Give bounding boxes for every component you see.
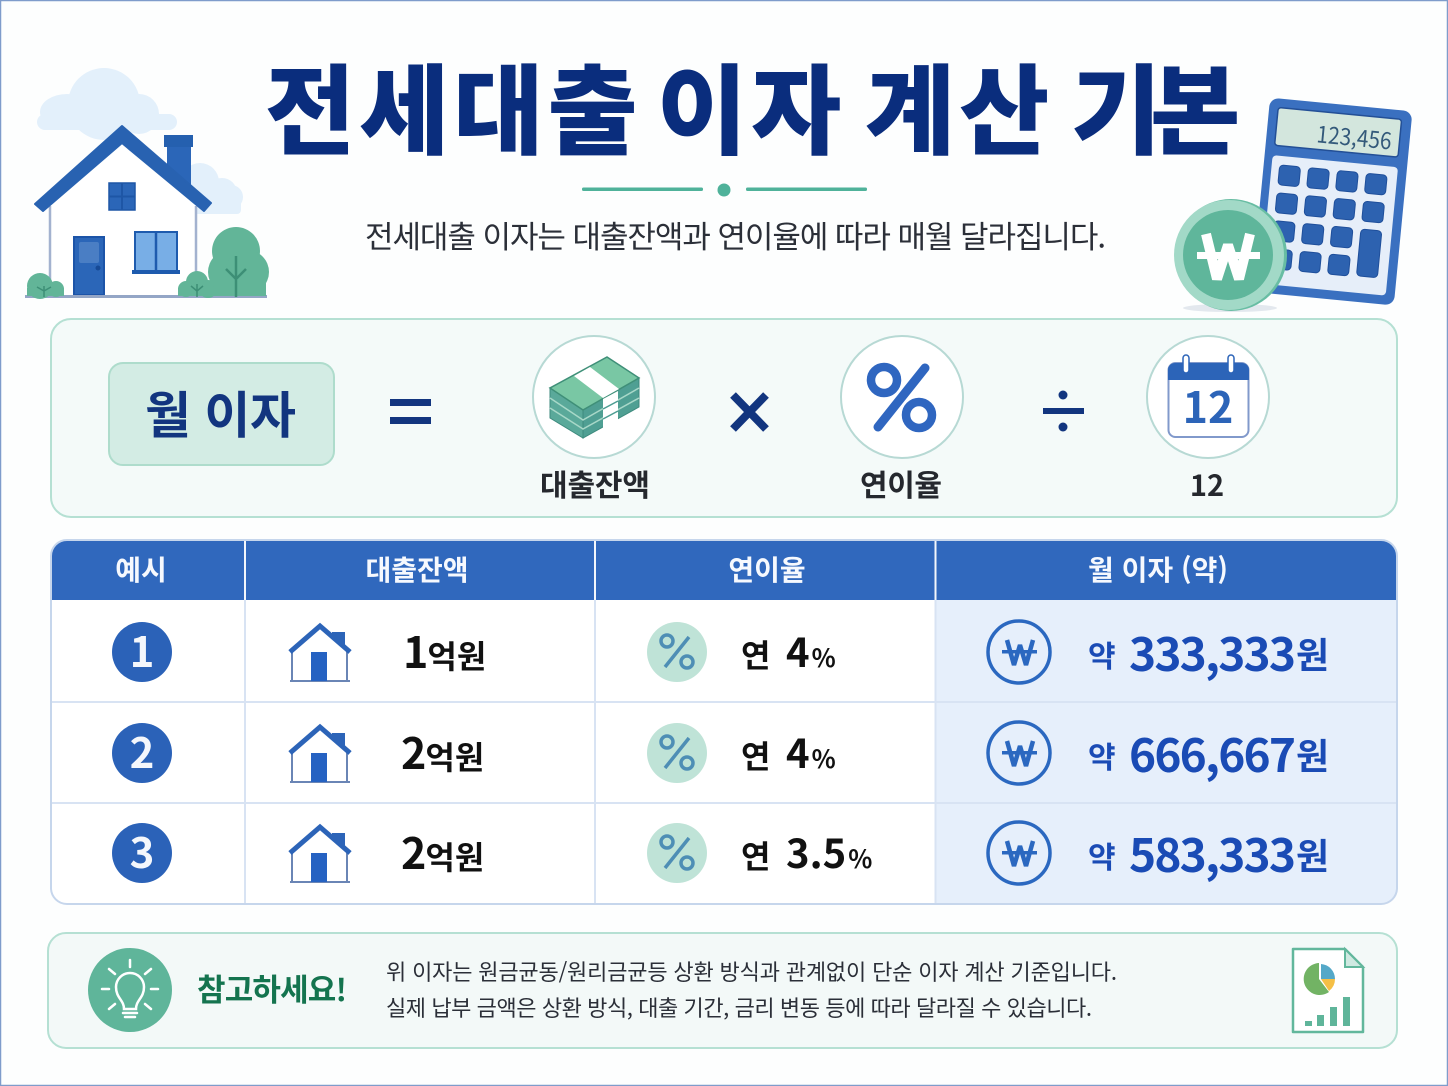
formula labels — [540, 461, 1224, 505]
table row 2: 666,667 — [1129, 720, 1296, 786]
formula result box: 월 이자 — [145, 376, 296, 448]
table row 1: 연 — [741, 631, 770, 677]
note text: 위 이자는 원금균동/원리금균등 상환 방식과 관계없이 단순 이자 계산 기준입니다. — [386, 955, 1117, 987]
table row 2 — [112, 720, 1329, 786]
table row 2: 2 — [130, 720, 154, 781]
table row 3: 583,333 — [1129, 820, 1296, 886]
table row 1: 4% — [786, 621, 836, 679]
table row 3 — [112, 820, 1329, 886]
note text: 실제 납부 금액은 상환 방식, 대출 기간, 금리 변동 등에 따라 달라질 수 있습니다. — [386, 991, 1092, 1023]
note heading: 참고하세요! — [197, 965, 347, 1010]
icon: money stack — [533, 336, 655, 458]
equals sign — [390, 399, 431, 424]
icon: won coin — [1174, 199, 1287, 311]
divide sign — [1043, 390, 1084, 432]
table header — [51, 540, 1397, 600]
table row 3: 약 — [1088, 833, 1116, 877]
formula labels: 대출잔액 — [540, 461, 650, 505]
table row 3: 3 — [130, 820, 154, 881]
title: 이자 — [657, 33, 845, 175]
table header: 예시 — [115, 549, 167, 589]
icon: report document — [1293, 949, 1363, 1032]
icon: calculator and won coin: 123,456 — [1315, 115, 1393, 156]
panel: example table — [51, 540, 1397, 904]
table row 1: 1억원 — [403, 619, 486, 681]
table header: 연이율 — [728, 549, 806, 589]
table row 1 — [112, 619, 1329, 685]
formula labels: 12 — [1190, 463, 1224, 505]
table row 3: 원 — [1296, 828, 1329, 880]
icon: light bulb — [88, 948, 172, 1032]
panel: formula — [51, 319, 1397, 517]
table row 2: 연 — [741, 732, 770, 778]
table row 1: 1 — [130, 619, 154, 680]
table row 1: 약 — [1088, 632, 1116, 676]
formula labels: 연이율 — [860, 461, 942, 505]
table row 2: 약 — [1088, 733, 1116, 777]
title: 기본 — [1071, 33, 1237, 175]
table row 1: 원 — [1296, 627, 1329, 679]
icon: percent — [841, 336, 963, 458]
table header: 대출잔액 — [365, 549, 469, 589]
table row 2: 4% — [786, 722, 836, 780]
panel: note — [48, 933, 1397, 1048]
table row 2: 2억원 — [401, 720, 484, 782]
icon: calendar 12: 12 — [1183, 374, 1233, 436]
table header: 월 이자 (약) — [1088, 549, 1228, 589]
icon: calendar 12 — [1147, 336, 1269, 458]
table row 1: 333,333 — [1129, 619, 1296, 685]
table row 3: 2억원 — [401, 820, 484, 882]
title: 계산 — [865, 33, 1053, 175]
subtitle: 전세대출 이자는 대출잔액과 연이율에 따라 매월 달라집니다. — [365, 212, 1106, 257]
note text — [386, 955, 1117, 1023]
table row 3: 연 — [741, 832, 770, 878]
multiply sign — [733, 395, 766, 429]
title: 전세대출 — [265, 33, 642, 175]
title divider — [582, 184, 867, 196]
icon: calculator and won coin — [1174, 98, 1412, 312]
formula result box — [109, 363, 334, 465]
table row 2: 원 — [1296, 728, 1329, 780]
icon: house with clouds and trees — [25, 68, 269, 299]
table row 3: 3.5% — [786, 822, 872, 880]
